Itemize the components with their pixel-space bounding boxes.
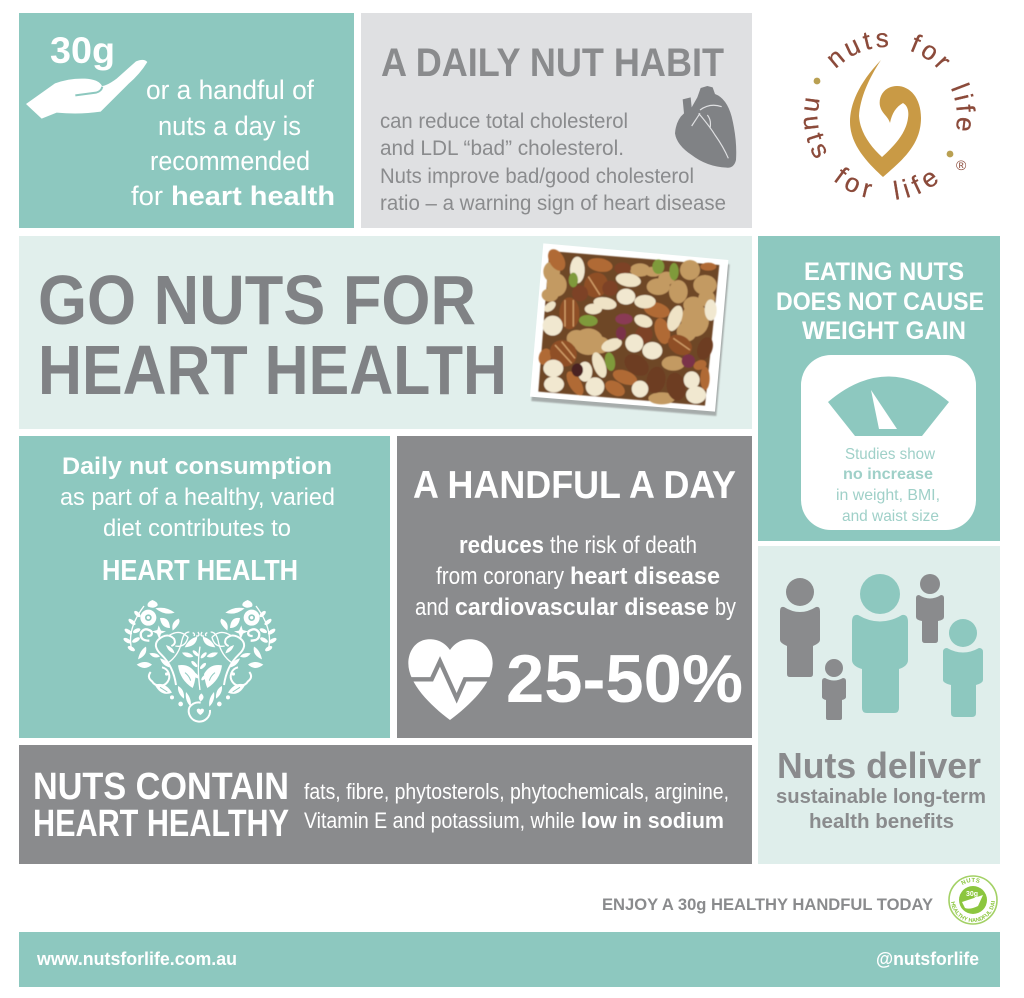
heading: nuts contain heart healthy: HEART HEALTHY <box>33 803 289 845</box>
panel: go nuts for heart health <box>19 236 752 429</box>
text: sustainable benefits: health benefits <box>809 811 954 833</box>
text: sustainable benefits: sustainable long-term <box>776 786 986 808</box>
icon: group of people <box>780 574 983 720</box>
heading: nuts contain heart healthy <box>33 766 289 845</box>
footer bar <box>19 932 1000 987</box>
logo: nuts for life <box>804 32 976 200</box>
text: risk reduction <box>415 532 736 621</box>
text: nutrient list: fats, fibre, phytosterols, phytochemicals, arginine, <box>304 779 729 804</box>
icon: open hand <box>26 60 147 119</box>
text: handful recommendation: heart health <box>171 181 335 211</box>
title: HEART HEALTH <box>38 331 507 409</box>
text: daily consumption: diet contributes to <box>103 515 291 542</box>
panel: weight gain <box>758 236 1000 541</box>
text: sustainable benefits <box>776 786 986 833</box>
text: studies show: Studies show <box>845 446 935 463</box>
title <box>38 261 507 409</box>
text: daily consumption: Daily nut consumption <box>62 453 332 480</box>
text: handful recommendation: recommended <box>150 146 310 176</box>
panel: nuts contain <box>19 745 752 864</box>
text: studies show: no increase <box>843 466 933 483</box>
amount: 30g: 30g <box>50 30 115 71</box>
text: nutrient list: Vitamin E and potassium, while <box>304 808 575 833</box>
icon: heart with pulse <box>408 639 493 720</box>
text: studies show <box>836 446 940 525</box>
text: risk reduction: from coronary <box>436 563 564 590</box>
logo mark: gold swirl <box>850 60 921 177</box>
heading: eating nuts does not cause weight gain: WEIGHT GAIN <box>802 317 966 345</box>
text: risk reduction: reduces <box>459 532 544 559</box>
text: handful recommendation <box>131 75 335 211</box>
text: handful recommendation: or a handful of <box>146 75 314 105</box>
social handle: @nutsforlife <box>876 949 979 969</box>
text: nutrient list <box>304 779 729 833</box>
title: GO NUTS FOR <box>38 261 476 339</box>
heading: eating nuts does not cause weight gain: EATING NUTS <box>804 258 964 286</box>
text: handful recommendation: for <box>131 181 163 211</box>
statistic: 25-50%: 25-50% <box>506 641 743 717</box>
icon: healthy handful badge: HEALTHY HANDFUL DAILY <box>951 901 995 922</box>
photo: mixed nuts <box>530 243 730 416</box>
panel: 30g handful <box>19 13 354 228</box>
panel: a handful a day <box>397 436 752 738</box>
website: www.nutsforlife.com.au <box>36 949 237 969</box>
text: risk reduction: the risk of death <box>550 532 697 559</box>
text: cholesterol benefit: Nuts improve bad/good cholesterol <box>380 165 694 188</box>
text: risk reduction: heart disease <box>570 563 720 590</box>
logo text: bottom arc: nuts for life <box>804 98 938 200</box>
text: studies show: in weight, BMI, <box>836 487 940 504</box>
panel: nuts deliver <box>758 546 1000 864</box>
icon: bathroom scale <box>801 355 976 530</box>
text: risk reduction: cardiovascular disease <box>455 594 709 621</box>
text: daily consumption <box>60 453 335 542</box>
heading: heart health: HEART HEALTH <box>102 555 298 587</box>
text: daily consumption: as part of a healthy, varied <box>60 484 335 511</box>
icon: healthy handful badge: 30g <box>966 891 978 898</box>
tagline: enjoy a 30g healthy handful: ENJOY A 30g HEALTHY HANDFUL TODAY <box>602 895 934 914</box>
logo text: top arc: nuts for life <box>828 32 976 130</box>
panel: a daily nut habit <box>361 13 752 228</box>
heading: a daily nut habit: A DAILY NUT HABIT <box>381 41 724 85</box>
text: nutrient list: low in sodium <box>581 808 724 833</box>
heading: eating nuts does not cause weight gain: DOES NOT CAUSE <box>776 288 984 316</box>
heading: eating nuts does not cause weight gain <box>776 258 984 345</box>
text: cholesterol benefit: can reduce total cholesterol <box>380 110 628 133</box>
text: cholesterol benefit <box>380 110 726 215</box>
text: risk reduction: by <box>715 594 736 621</box>
icon: healthy handful badge: NUTS <box>961 878 980 885</box>
text: handful recommendation: nuts a day is <box>158 111 301 141</box>
text: studies show: and waist size <box>842 508 939 525</box>
heading: a handful a day: A HANDFUL A DAY <box>413 464 736 507</box>
text: cholesterol benefit: and LDL “bad” cholesterol. <box>380 137 624 160</box>
text: cholesterol benefit: ratio – a warning sign of heart disease <box>380 192 726 215</box>
icon: anatomical heart <box>675 86 736 168</box>
icon: floral heart <box>123 600 277 722</box>
heading: nuts deliver: Nuts deliver <box>777 745 981 786</box>
heading: nuts contain heart healthy: NUTS CONTAIN <box>33 766 289 808</box>
registered mark: ® <box>956 157 967 173</box>
text: risk reduction: and <box>415 594 449 621</box>
panel: daily nut consumption <box>19 436 390 738</box>
